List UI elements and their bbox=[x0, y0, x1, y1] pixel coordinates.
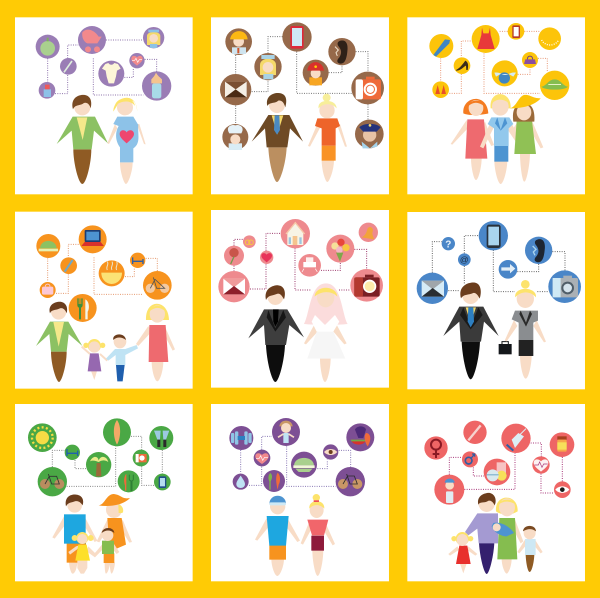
icon: wedding rings bbox=[243, 235, 256, 248]
icon: umbrella bbox=[429, 34, 453, 58]
icon: dumbbell bbox=[229, 426, 253, 450]
figure: businessman in brown suit bbox=[252, 93, 303, 182]
icon: telephone handset bbox=[328, 38, 356, 65]
figure: businesswoman in grey suit bbox=[505, 280, 546, 379]
icon: fork and knife bbox=[263, 470, 285, 492]
icon: laptop bbox=[79, 225, 107, 253]
connector lines bbox=[52, 436, 162, 486]
icon: male symbol bbox=[462, 451, 478, 467]
panel: family at the beach bbox=[15, 404, 193, 581]
figure: man in green jacket bbox=[57, 95, 108, 184]
icon: sun hat bbox=[540, 71, 569, 100]
icon: baby bodysuit bbox=[98, 61, 124, 87]
icon: swim fins bbox=[149, 426, 173, 450]
figure: woman in coral top and maroon shorts bbox=[301, 494, 335, 576]
icon: rose bbox=[224, 246, 244, 266]
panel: family health bbox=[407, 404, 585, 581]
connector lines bbox=[48, 244, 157, 294]
icon: eye bbox=[554, 481, 571, 498]
panel: expecting couple bbox=[15, 17, 193, 194]
icon: chapel bbox=[281, 219, 310, 248]
icon: camera bbox=[350, 269, 383, 302]
figure: woman in blue shirt bbox=[480, 94, 523, 184]
icon: camera bbox=[133, 450, 149, 466]
icon: high heel bbox=[454, 57, 470, 74]
connector lines bbox=[441, 31, 547, 93]
icon: heart bbox=[260, 251, 273, 264]
icon: bouquet bbox=[326, 235, 354, 263]
icon: pram bbox=[78, 26, 106, 54]
panel: fitness couple bbox=[211, 404, 389, 581]
icon: surfboard bbox=[103, 418, 131, 446]
icon: steaming bowl bbox=[99, 260, 125, 286]
icon: syringe bbox=[501, 424, 531, 453]
icon: heart rate bbox=[254, 450, 270, 466]
figure: mother in green dress bbox=[492, 498, 523, 574]
connector lines bbox=[432, 236, 565, 292]
icon: twin figures bbox=[432, 81, 449, 98]
figure: son in green shirt bbox=[95, 528, 119, 574]
figure: pregnant woman bbox=[107, 98, 146, 184]
icon: phone bbox=[154, 474, 171, 490]
figure: daughter in red dress bbox=[448, 532, 477, 573]
figure: father bbox=[36, 302, 82, 382]
icon: small bottle bbox=[39, 82, 55, 99]
icon: arrow bbox=[499, 260, 517, 279]
figure: daughter in yellow dress bbox=[68, 532, 102, 574]
icon: heartbeat bbox=[129, 53, 145, 68]
panel: wedding bbox=[211, 210, 389, 388]
icon: nurse bbox=[143, 27, 164, 48]
icon: thermometer bbox=[60, 58, 77, 75]
icon: bicycle bbox=[38, 467, 67, 496]
icon: eye bbox=[323, 444, 338, 460]
icon: heart rate bbox=[532, 456, 550, 474]
icon: water drop bbox=[233, 474, 249, 490]
connector lines bbox=[241, 436, 351, 486]
icon: yoga girl bbox=[272, 418, 300, 446]
icon: dress bbox=[472, 25, 500, 53]
figure: man in blue tank and cap bbox=[255, 496, 300, 576]
icon: fork and knife bbox=[118, 470, 140, 492]
icon: thermometer bbox=[60, 257, 77, 274]
icon: telephone handset bbox=[525, 237, 552, 264]
icon: at sign bbox=[458, 253, 471, 266]
icon: bicycle bbox=[336, 467, 365, 496]
figure: little boy bbox=[106, 334, 138, 381]
figure: son in light blue shirt bbox=[517, 526, 543, 572]
figure: mother in red dress bbox=[136, 304, 175, 381]
connector lines bbox=[48, 40, 157, 95]
figure: woman in red dress bbox=[451, 99, 494, 180]
panel: friends and fashion bbox=[407, 17, 585, 194]
icon: camera bbox=[351, 72, 384, 104]
icon: question mark: ? bbox=[445, 239, 451, 250]
icon: female symbol bbox=[424, 436, 448, 460]
figure: little girl bbox=[82, 339, 107, 380]
panel: business couple bbox=[407, 212, 585, 389]
icon: envelope bbox=[417, 273, 448, 304]
icon: question mark bbox=[442, 237, 455, 250]
icon: baby food bbox=[36, 35, 60, 59]
icon: construction worker bbox=[225, 28, 252, 55]
connector lines bbox=[234, 233, 367, 290]
connector lines bbox=[449, 443, 562, 493]
icon: briefcase bbox=[499, 342, 512, 354]
connector lines bbox=[236, 37, 368, 124]
icon: food dome bbox=[291, 452, 317, 478]
icon: handbag bbox=[522, 52, 538, 68]
figure: groom in tuxedo bbox=[248, 285, 304, 382]
icon: fork and knife bbox=[69, 294, 97, 322]
icon: chef bbox=[222, 124, 248, 150]
panel: working couple bbox=[211, 17, 389, 194]
icon: palm tree bbox=[86, 452, 111, 477]
icon: bell bbox=[359, 223, 378, 242]
icon: bed bbox=[130, 253, 145, 268]
icon: bed bbox=[65, 445, 80, 460]
icon: nurse with drip bottle bbox=[434, 475, 464, 505]
figure: father in blue tank bbox=[52, 495, 97, 574]
panel: family with food and home bbox=[15, 212, 193, 389]
icon: swimwear bbox=[492, 60, 518, 86]
figure: bride with veil bbox=[304, 283, 348, 382]
icon: police officer bbox=[355, 120, 384, 148]
figure: father in purple shirt bbox=[465, 493, 498, 574]
icon: medicine bottle bbox=[550, 432, 574, 457]
figure: woman in green dress with hat bbox=[510, 95, 543, 182]
figure: mother in orange dress and hat bbox=[97, 494, 132, 549]
icon: wedding cake bbox=[298, 254, 321, 277]
icon: pills bbox=[484, 459, 510, 485]
icon: firefighter bbox=[303, 60, 329, 86]
icon: cooking pot bbox=[36, 234, 60, 258]
icon: camera bbox=[548, 270, 581, 303]
icon: nurse bbox=[254, 53, 282, 80]
icon: lunch box bbox=[40, 282, 56, 298]
figure: woman in orange uniform bbox=[308, 94, 347, 182]
icon: at sign: @ bbox=[460, 255, 469, 265]
icon: smartphone bbox=[479, 221, 508, 250]
icon: smartphone bbox=[282, 22, 312, 52]
icon: envelope bbox=[220, 74, 251, 105]
icon: fruit bbox=[346, 423, 374, 451]
icon: necklace bbox=[538, 27, 561, 50]
icon: phone bbox=[508, 23, 524, 40]
icon: bicycle bbox=[143, 271, 172, 300]
icon: feeding bottle bbox=[142, 71, 171, 101]
icon: sun bbox=[28, 423, 57, 452]
icon: thermometer bbox=[463, 421, 487, 444]
icon: envelope bbox=[218, 271, 250, 302]
figure: businessman in black suit bbox=[443, 282, 499, 379]
